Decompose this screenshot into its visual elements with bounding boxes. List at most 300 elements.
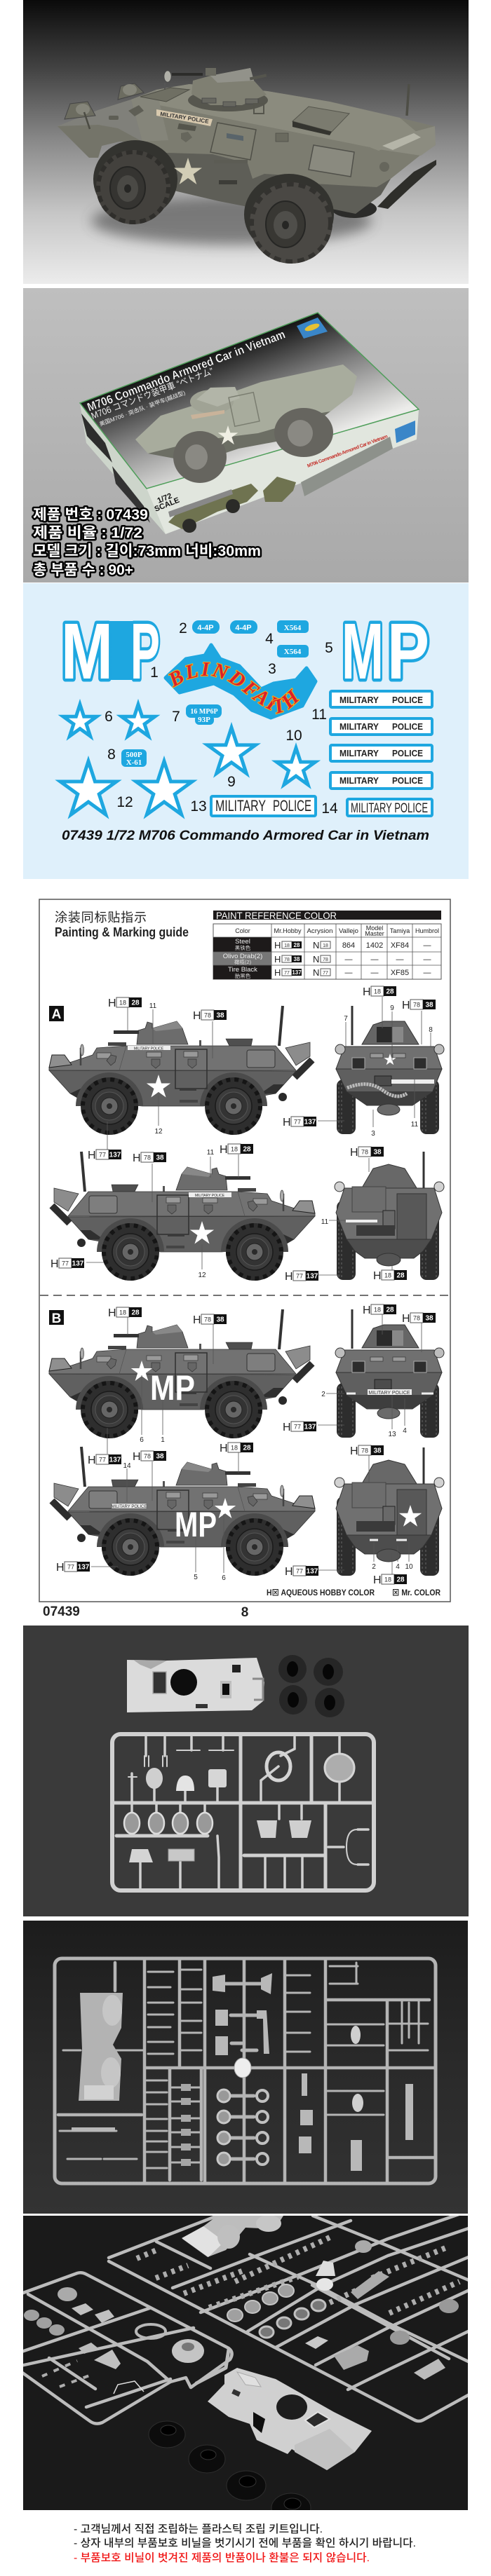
paint reference table: XF84 xyxy=(391,941,409,950)
paint tag H 18/28: 18 xyxy=(119,1309,126,1316)
leader lines and numbers: scheme A: 12 xyxy=(198,1272,206,1279)
leader lines and numbers: scheme A: 7 xyxy=(344,1015,348,1023)
paint tag H 77/137 xyxy=(283,1422,316,1433)
badge A: A xyxy=(52,1007,62,1022)
paint reference table: — xyxy=(424,955,431,964)
decal 5: MP right: P xyxy=(387,607,429,695)
paint tag H 78/38: H xyxy=(350,1445,358,1457)
photo: military police plate: MILITARY POLICE xyxy=(160,111,210,125)
leader lines and numbers: scheme A: 8 xyxy=(429,1026,433,1034)
paint tag H 18/28: 28 xyxy=(243,1145,251,1154)
decal numbers xyxy=(105,620,338,817)
decal 11: military police plates: POLICE xyxy=(392,695,423,705)
paint reference table: 137 xyxy=(292,969,302,976)
decal numbers: 7 xyxy=(172,709,180,725)
decal 8: 500P X-61: X-61 xyxy=(126,758,142,767)
overlay: product specifications: 모델 크기 : 길이:73mm 너비:30mm xyxy=(33,543,261,559)
box: logo xyxy=(297,318,328,339)
photo: front wheel xyxy=(250,182,332,264)
paint tag H 78/38: 38 xyxy=(373,1447,382,1455)
paint reference table: N xyxy=(313,954,319,965)
paint reference table: PAINT REFERENCE COLOR xyxy=(216,910,337,921)
paint tag H 77/137 xyxy=(51,1258,84,1270)
panel: angled parts photo xyxy=(18,2208,477,2523)
decal 7: 16 MP6P xyxy=(186,704,222,725)
paint tag H 77/137: H xyxy=(283,1422,291,1433)
paint reference table: — xyxy=(396,955,404,964)
paint reference table: Humbrol xyxy=(415,927,439,934)
paint tag H 18/28 xyxy=(220,1443,253,1454)
scheme A: left side view xyxy=(49,1006,312,1135)
paint tag H 78/38: H xyxy=(133,1451,141,1463)
decal numbers: 2 xyxy=(179,620,187,636)
badge B: B xyxy=(52,1311,61,1326)
panel: painting and marking guide xyxy=(39,899,450,1602)
paint reference table: H xyxy=(274,940,281,950)
paint tag H 78/38: 38 xyxy=(373,1148,382,1157)
paint tag H 77/137: 77 xyxy=(99,1151,106,1158)
blind faith decal xyxy=(347,1084,407,1096)
paint reference table: Vallejo xyxy=(339,927,358,934)
guide title: Painting & Marking guide xyxy=(55,925,189,939)
decal 1: MP left xyxy=(61,607,160,695)
decal 4: X564 pills: X564 xyxy=(284,648,302,656)
paint tag H 78/38: 38 xyxy=(216,1012,224,1019)
paint tag H 78/38: H xyxy=(350,1147,358,1159)
paint tag H 18/28: H xyxy=(363,1304,371,1316)
scheme A: rear view xyxy=(335,1152,444,1280)
decal 7: 16 MP6P: 93P xyxy=(198,716,210,724)
badge B xyxy=(49,1310,64,1326)
scheme B: right side view xyxy=(52,1447,315,1576)
paint reference table: 38 xyxy=(294,956,300,962)
photo: hatches and door xyxy=(177,107,436,184)
leader lines and numbers: scheme A: 11 xyxy=(149,1002,157,1010)
paint tag H 78/38: 78 xyxy=(361,1447,368,1454)
paint reference table: Model xyxy=(366,925,383,932)
sprue A frame and runners xyxy=(55,1958,436,2183)
paint tag H 18/28: 18 xyxy=(231,1145,238,1152)
decal plate: MILITARY POLICE xyxy=(368,1391,410,1396)
wheel hubs on sprue xyxy=(217,2058,268,2165)
paint tag H 18/28: 28 xyxy=(243,1444,251,1452)
paint tag H 18/28: 28 xyxy=(396,1576,405,1584)
paint tag H 77/137: 77 xyxy=(296,1567,303,1574)
paint tag H 77/137: 137 xyxy=(109,1457,121,1464)
paint reference table: H xyxy=(274,967,281,978)
paint reference table: 28 xyxy=(294,942,300,948)
paint reference table: 77 xyxy=(284,971,290,976)
leader lines and numbers: scheme B: 13 xyxy=(388,1431,396,1438)
large sprue xyxy=(109,2208,477,2421)
paint tag H 77/137: 77 xyxy=(62,1260,69,1267)
decal numbers: 5 xyxy=(325,640,333,656)
paint tag H 78/38 xyxy=(350,1147,384,1159)
paint tag H 18/28: H xyxy=(108,997,116,1009)
paint tag H 18/28 xyxy=(108,1307,142,1319)
leader lines and numbers: scheme B: 4 xyxy=(403,1427,407,1435)
paint tag H 18/28: 18 xyxy=(231,1444,238,1451)
paint tag H 77/137 xyxy=(56,1562,90,1574)
paint tag H 77/137: H xyxy=(283,1117,291,1129)
paint reference table: — xyxy=(424,941,431,950)
paint tag H 18/28: 28 xyxy=(396,1272,405,1280)
paint reference table: Olivo Drab(2) xyxy=(223,953,262,960)
decal 7: 16 MP6P: 16 MP6P xyxy=(190,708,218,716)
guide title xyxy=(55,911,189,939)
paint tag H 78/38: H xyxy=(193,1314,201,1326)
decal 14: plate xyxy=(347,799,432,816)
legend: H⊠ AQUEOUS HOBBY COLOR xyxy=(267,1588,375,1597)
paint tag H 78/38: 38 xyxy=(156,1452,164,1461)
overlay: product specifications: 제품 번호 : 07439 xyxy=(33,507,148,523)
decal numbers: 6 xyxy=(105,709,113,725)
paint tag H 18/28: H xyxy=(108,1307,116,1319)
decal star xyxy=(384,1054,396,1065)
decal 5: MP right: M xyxy=(342,607,384,695)
paint tag H 18/28: 18 xyxy=(384,1272,391,1279)
paint tag H 77/137: 137 xyxy=(304,1423,316,1431)
paint tag H 77/137: 77 xyxy=(294,1423,301,1430)
larger sprue parts xyxy=(72,1973,413,2171)
paint tag H 77/137: H xyxy=(51,1258,59,1270)
footer notes: - 상자 내부의 부품보호 비닐을 벗기시기 전에 부품을 확인 하시기 바랍니다. xyxy=(74,2537,416,2549)
paint reference table: Color xyxy=(235,927,250,934)
paint tag H 18/28: 28 xyxy=(386,1307,394,1314)
decal numbers: 1 xyxy=(150,665,159,681)
leader lines and numbers: scheme B: 6 xyxy=(222,1574,226,1582)
paint reference table: — xyxy=(370,969,379,977)
leader lines and numbers: scheme A: 9 xyxy=(390,1004,394,1012)
decal 8: 500P X-61 xyxy=(121,749,147,767)
leader lines and numbers: scheme A xyxy=(86,997,433,1279)
paint reference table: — xyxy=(370,955,379,964)
paint reference table: 黑铁色 xyxy=(235,944,251,951)
leader lines and numbers: scheme B: 1 xyxy=(161,1436,165,1444)
page code: 07439 xyxy=(43,1604,80,1619)
paint tag H 18/28: H xyxy=(373,1574,382,1586)
decal numbers: 10 xyxy=(285,728,302,744)
paint tag H 78/38: H xyxy=(402,1313,410,1325)
paint reference table: 78 xyxy=(284,958,290,962)
footer notes: - 고객님께서 직접 조립하는 플라스틱 조립 키트입니다. xyxy=(74,2523,323,2535)
decal plate: MILITARY POLICE xyxy=(134,1047,164,1051)
paint tag H 18/28: 28 xyxy=(131,1000,140,1007)
legend xyxy=(267,1588,441,1597)
paint tag H 18/28: 18 xyxy=(119,1000,126,1007)
decal MP: MP xyxy=(175,1505,217,1544)
paint tag H 77/137: 137 xyxy=(72,1260,84,1267)
decal star xyxy=(147,1075,170,1098)
paint tag H 78/38: 38 xyxy=(425,1001,433,1009)
sprue B xyxy=(112,1734,374,1890)
decal plate xyxy=(346,1220,377,1222)
scheme B: front view xyxy=(335,1309,444,1438)
decal plate xyxy=(391,1079,434,1084)
footer notes: - 부품보호 비닐이 벗겨진 제품의 반품이나 환불은 되지 않습니다. xyxy=(74,2551,370,2564)
leader lines and numbers: scheme B xyxy=(91,1314,422,1582)
box: title text: M706 Commando Armored Car in Vietnam xyxy=(86,327,287,414)
paint tag H 18/28: 28 xyxy=(131,1309,140,1316)
decal plate: MILITARY POLICE xyxy=(195,1194,225,1198)
photo: vehicle shadow xyxy=(91,197,372,245)
box: title text: M706 コマンドウ装甲車 “ベトナム” xyxy=(90,366,215,421)
paint tag H 78/38: 78 xyxy=(144,1452,151,1459)
paint tag H 77/137: H xyxy=(285,1271,293,1283)
paint tag H 77/137: 137 xyxy=(307,1273,318,1280)
paint tag H 77/137: H xyxy=(285,1566,293,1578)
paint reference table: 18 xyxy=(284,943,290,948)
photo: armored car model xyxy=(58,68,436,264)
paint reference table: 18 xyxy=(323,943,328,948)
decal 11: military police plates: MILITARY xyxy=(339,721,379,732)
paint tag H 78/38 xyxy=(133,1152,166,1164)
panel: decal sheet xyxy=(23,583,469,879)
decal numbers: 12 xyxy=(116,794,133,810)
paint reference table: H xyxy=(274,954,281,965)
panel: parts photo, sprue and tires xyxy=(23,1626,469,1916)
scheme B: left side view xyxy=(49,1309,312,1438)
paint tag H 78/38 xyxy=(193,1314,227,1326)
paint tag H 18/28: H xyxy=(363,986,371,998)
badge A xyxy=(49,1006,64,1022)
page number: 8 xyxy=(241,1605,248,1620)
photo: white star xyxy=(174,158,202,184)
paint reference table: Tire Black xyxy=(228,966,257,974)
paint tag H 78/38: 78 xyxy=(361,1148,368,1155)
paint reference table: 橄榄(2) xyxy=(234,958,252,965)
legend: ⊠ Mr. COLOR xyxy=(392,1588,441,1597)
paint tag H 77/137: 77 xyxy=(67,1563,74,1570)
decal 6: small stars xyxy=(63,704,155,736)
decal 1: MP left: M xyxy=(61,607,113,695)
paint tag H 18/28: 18 xyxy=(374,988,381,995)
paint tag H 78/38: 78 xyxy=(413,1315,420,1322)
decal numbers: 11 xyxy=(311,707,327,723)
paint reference table: N xyxy=(313,940,319,950)
leader lines and numbers: scheme A: 3 xyxy=(371,1130,375,1138)
paint tag H 18/28 xyxy=(373,1270,407,1282)
leader lines and numbers: scheme A: 11 xyxy=(411,1121,419,1129)
paint tag H 78/38: 78 xyxy=(413,1001,420,1008)
paint tag H 78/38: 78 xyxy=(204,1012,211,1019)
box: front side: SCALE xyxy=(154,496,181,514)
decal star xyxy=(131,1361,152,1381)
paint tag H 78/38 xyxy=(402,1313,436,1325)
decal 12: large stars xyxy=(60,761,192,815)
paint tag H 18/28: H xyxy=(373,1270,382,1282)
paint tag H 77/137 xyxy=(283,1117,316,1129)
photo: headlight guards and front hatch xyxy=(65,83,189,129)
decal numbers: 9 xyxy=(227,774,236,790)
paint tag H 18/28: H xyxy=(220,1144,228,1156)
paint reference table: 1402 xyxy=(366,941,383,950)
paint tag H 77/137: 137 xyxy=(109,1151,121,1159)
overlay: product specifications: 제품 비율 : 1/72 xyxy=(33,525,142,541)
panel: product photo of assembled M706 armored car xyxy=(23,0,469,284)
decal 11: military police plates: MILITARY xyxy=(339,748,379,758)
decal 3: Blind Faith banner: BLINDFAITH xyxy=(168,662,300,715)
loose tires xyxy=(149,2421,311,2510)
chassis on sprue xyxy=(182,2215,283,2257)
decal 10: star xyxy=(276,748,316,784)
decal 1: MP left: P xyxy=(130,607,160,695)
paint tag H 78/38 xyxy=(133,1451,166,1463)
panel: parts photo, sprue A xyxy=(23,1921,468,2214)
scheme B: rear view xyxy=(335,1447,444,1576)
box: description text block xyxy=(301,437,393,496)
decal numbers: 8 xyxy=(107,747,116,763)
leader lines and numbers: scheme B: 10 xyxy=(405,1563,413,1571)
decal plate: MILITARY POLICE xyxy=(112,1505,147,1509)
leader lines and numbers: scheme B: 2 xyxy=(372,1563,376,1571)
paint tag H 78/38 xyxy=(402,1000,436,1011)
paint tag H 18/28 xyxy=(363,1304,396,1316)
decal 13: plate: POLICE xyxy=(273,797,311,815)
paint tag H 78/38: 38 xyxy=(156,1154,164,1162)
paint reference table: — xyxy=(345,969,352,977)
decal MP: MP xyxy=(150,1368,195,1408)
decal 11: military police plates xyxy=(330,691,432,789)
paint tag H 77/137: 77 xyxy=(296,1273,303,1280)
decals 4-4P and X564 xyxy=(370,1539,407,1541)
decal 11: military police plates: POLICE xyxy=(392,775,423,786)
paint tag H 18/28 xyxy=(373,1574,407,1586)
decal numbers: 14 xyxy=(321,800,338,817)
decal star xyxy=(215,1498,236,1518)
paint tag H 78/38: 78 xyxy=(204,1316,211,1323)
guide title: 涂装同标贴指示 xyxy=(55,911,147,925)
decal 2: 4-4P pills xyxy=(192,620,257,634)
paint reference table: Master xyxy=(365,930,384,937)
paint reference table: 77 xyxy=(323,971,328,976)
paint tag H 78/38: H xyxy=(402,1000,410,1011)
photo: rear bumper xyxy=(377,160,436,209)
paint tag H 18/28 xyxy=(108,997,142,1009)
decal star xyxy=(190,1221,214,1244)
paint tag H 77/137 xyxy=(88,1150,121,1161)
leader lines and numbers: scheme B: 2 xyxy=(321,1391,325,1398)
paint tag H 77/137: H xyxy=(88,1150,96,1161)
paint reference table: 864 xyxy=(342,941,355,950)
paint tag H 78/38 xyxy=(350,1445,384,1457)
leader lines and numbers: scheme B: 4 xyxy=(396,1563,400,1571)
leader lines and numbers: scheme B: 14 xyxy=(123,1462,131,1470)
box: side title: M706 Commando Armored Car in Vietnam xyxy=(307,434,389,469)
decal sheet caption: 07439 1/72 M706 Commando Armored Car in Vietnam xyxy=(62,829,429,843)
decal plate xyxy=(128,1046,170,1051)
decal 8: 500P X-61: 500P xyxy=(126,751,142,759)
decal numbers: 13 xyxy=(190,798,207,815)
four tires xyxy=(278,1655,344,1717)
paint tag H 77/137 xyxy=(285,1566,318,1578)
box: side logo xyxy=(395,421,415,443)
paint tag H 78/38: 38 xyxy=(425,1315,433,1322)
loose hull xyxy=(208,2368,372,2470)
paint tag H 77/137 xyxy=(88,1454,121,1466)
paint tag H 78/38: 38 xyxy=(216,1316,224,1323)
box: front side xyxy=(147,409,419,534)
decal star xyxy=(399,1505,422,1527)
decals 4-4P and X564 xyxy=(347,1392,433,1395)
decal 9: star xyxy=(208,728,255,773)
paint tag H 77/137: 137 xyxy=(78,1563,90,1572)
decal 4: X564 pills xyxy=(277,620,309,657)
decal 11: military police plates: POLICE xyxy=(392,721,423,732)
hull top part xyxy=(127,1658,264,1712)
paint reference table: N xyxy=(313,967,319,978)
panel: product box photo xyxy=(23,288,469,582)
box: vehicle art xyxy=(135,364,357,483)
paint tag H 77/137: 77 xyxy=(294,1119,301,1126)
paint tag H 18/28 xyxy=(363,986,396,998)
box: title text: 美国M706 · 突击队 · 装甲车(越战型) xyxy=(98,389,187,428)
paint tag H 78/38: 78 xyxy=(144,1154,151,1161)
paint tag H 78/38: H xyxy=(193,1010,201,1022)
photo: rear wheel xyxy=(96,150,170,224)
decal numbers: 3 xyxy=(268,661,276,677)
box: side vehicle art xyxy=(168,477,296,533)
leader lines and numbers: scheme B: 6 xyxy=(140,1436,144,1444)
overlay: product specifications xyxy=(33,507,261,578)
decal 11: military police plates: MILITARY xyxy=(339,695,379,705)
leader lines and numbers: scheme A: 11 xyxy=(321,1218,329,1226)
paint reference table: — xyxy=(345,955,352,964)
photo: turret xyxy=(164,68,268,114)
paint tag H 77/137: 137 xyxy=(307,1567,318,1576)
paint reference table: Tamiya xyxy=(390,927,410,934)
decal 11: military police plates: POLICE xyxy=(392,748,423,758)
leader lines and numbers: scheme A: 11 xyxy=(207,1149,215,1157)
paint tag H 77/137 xyxy=(285,1271,318,1283)
small sprue xyxy=(18,2272,232,2424)
decal 2: 4-4P pills: 4-4P xyxy=(197,624,214,632)
scheme A: front view xyxy=(335,1006,444,1134)
paint reference table: 78 xyxy=(323,958,328,962)
paint tag H 78/38: H xyxy=(133,1152,141,1164)
paint tag H 77/137: 137 xyxy=(304,1119,316,1126)
chassis part xyxy=(79,1993,123,2101)
overlay: product specifications: 총 부품 수 : 90+ xyxy=(33,562,133,578)
paint reference table: Steel xyxy=(235,938,250,946)
decal 13: plate xyxy=(211,796,316,816)
box: top face xyxy=(80,313,419,489)
leader lines and numbers: scheme A: 12 xyxy=(154,1128,163,1136)
leader lines and numbers: scheme B: 5 xyxy=(194,1574,198,1581)
decal 11: military police plates: MILITARY xyxy=(339,775,379,786)
paint tag H 18/28: 18 xyxy=(374,1307,381,1314)
paint tag H 77/137: H xyxy=(56,1562,65,1574)
paint reference table: 胎黑色 xyxy=(235,972,251,979)
paint tag H 77/137: H xyxy=(88,1454,96,1466)
decal 13: plate: MILITARY xyxy=(215,797,266,815)
decal numbers: 4 xyxy=(265,631,274,647)
box: scale text: 1/72 xyxy=(156,492,173,505)
decal plate xyxy=(189,1192,231,1198)
photo: antenna xyxy=(407,84,409,116)
paint tag H 18/28: 28 xyxy=(386,988,394,995)
decal 4: X564 pills: X564 xyxy=(284,624,302,632)
box: left side xyxy=(80,403,166,534)
scheme A: right side view xyxy=(52,1152,315,1281)
paint tag H 78/38 xyxy=(193,1010,227,1022)
paint tag H 77/137: 77 xyxy=(99,1457,106,1464)
footer notes xyxy=(74,2523,416,2564)
decal 2: 4-4P pills: 4-4P xyxy=(235,624,252,632)
decal 14: plate: MILITARY POLICE xyxy=(351,801,428,816)
paint reference table: XF85 xyxy=(391,969,409,977)
paint tag H 18/28: H xyxy=(220,1443,228,1454)
